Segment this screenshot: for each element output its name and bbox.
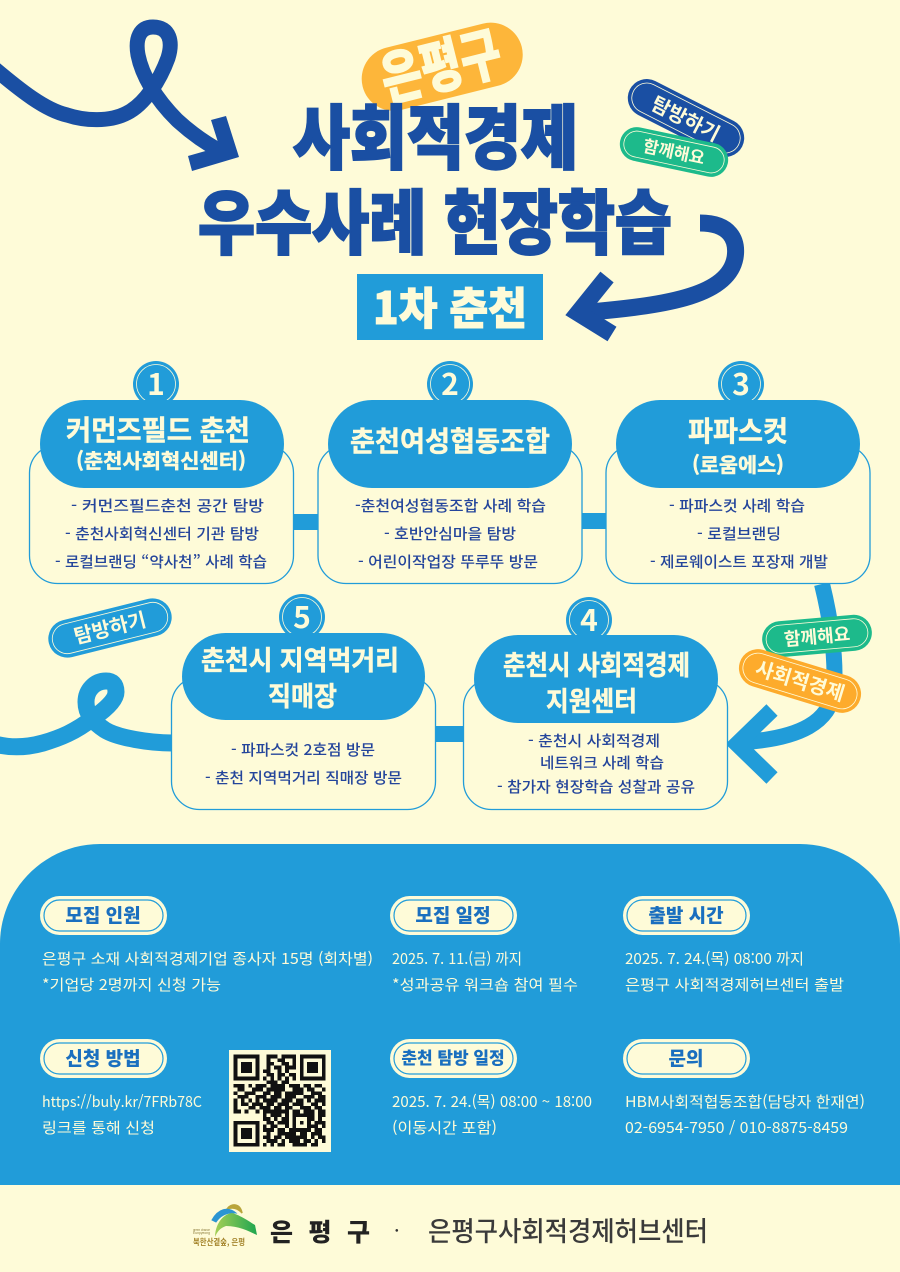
step 5 list — [205, 739, 402, 788]
text: 모집 일정 details: *성과공유 워크숍 참여 필수 — [392, 974, 578, 995]
step 1 heading pill: (춘천사회혁신센터) — [76, 445, 246, 474]
title — [198, 83, 672, 269]
subtitle box: 1차 춘천: 1차 춘천 — [373, 273, 527, 337]
text: 문의 details: 02-6954-7950 / 010-8875-8459 — [625, 1117, 848, 1138]
text: 모집 인원 details — [42, 948, 373, 995]
step 1 list: - 춘천사회혁신센터 기관 탐방 — [65, 523, 259, 544]
footer logo: Eunpyeong mountain mark — [193, 1205, 257, 1248]
label: 모집 일정 — [390, 896, 517, 935]
step 2 list: - 호반안심마을 탐방 — [384, 523, 516, 544]
label: 출발 시간 — [623, 896, 750, 935]
step 1 heading pill — [40, 400, 284, 488]
step 4 list: 네트워크 사례 학습 — [540, 752, 664, 773]
label: 출발 시간: 출발 시간 — [648, 901, 724, 928]
footer logo: Eunpyeong mountain mark: green chance — [193, 1228, 210, 1232]
text: 출발 시간 details: 은평구 사회적경제허브센터 출발 — [625, 974, 844, 995]
tag: 함께해요 green — [617, 124, 731, 180]
tag: 함께해요 green: 함께해요 — [641, 132, 708, 169]
title: 사회적경제 — [293, 83, 578, 184]
panel: step 4 — [464, 596, 728, 810]
tag: 탐방하기 dark blue: 탐방하기 — [647, 88, 726, 147]
step number 5 — [279, 593, 325, 640]
panel: info section — [0, 844, 900, 1185]
step 2 heading pill — [328, 400, 572, 488]
connector: card 4 to 5 — [436, 726, 463, 742]
panel: step 2 — [318, 360, 582, 584]
step number 3: 3 — [732, 360, 750, 404]
tag: 함께해요 green right — [761, 613, 873, 659]
step number 2 — [427, 360, 473, 407]
tag: 사회적경제 orange: 사회적경제 — [752, 652, 849, 707]
step number 3 — [718, 360, 764, 407]
step 5 list: - 춘천 지역먹거리 직매장 방문 — [205, 767, 402, 788]
step 3 list: - 제로웨이스트 포장재 개발 — [650, 551, 828, 572]
panel: step 5 — [172, 593, 436, 810]
text: 모집 인원 details: *기업당 2명까지 신청 가능 — [42, 974, 221, 995]
connector: card 2 to 3 — [582, 513, 606, 529]
label: 문의 — [623, 1039, 750, 1078]
label: 문의: 문의 — [669, 1044, 703, 1071]
label: 모집 인원: 모집 인원 — [65, 901, 141, 928]
squiggle: left light blue loop to card 5 — [0, 681, 172, 747]
arrow: top-left looping dark blue arrow — [0, 27, 239, 171]
qr code — [229, 1050, 331, 1152]
step 2 list — [355, 495, 546, 572]
footer text: 은평구사회적경제허브센터: 은평구사회적경제허브센터 — [428, 1210, 708, 1249]
step 4 list: - 춘천시 사회적경제 — [528, 730, 660, 751]
footer logo: Eunpyeong mountain mark: 북한산곁숲, 은평 — [193, 1236, 245, 1248]
step number 2: 2 — [441, 360, 459, 404]
step 4 heading pill: 춘천시 사회적경제 — [503, 644, 690, 683]
text: 춘천 탐방 일정 details: (이동시간 포함) — [392, 1117, 497, 1138]
label: 신청 방법: 신청 방법 — [65, 1044, 141, 1071]
tag: 탐방하기 light blue — [44, 594, 176, 662]
label: 모집 인원 — [40, 896, 167, 935]
text: 출발 시간 details: 2025. 7. 24.(목) 08:00 까지 — [625, 948, 804, 969]
step 4 list: - 참가자 현장학습 성찰과 공유 — [497, 776, 695, 797]
text: 춘천 탐방 일정 details: 2025. 7. 24.(목) 08:00 ~ 18:00 — [392, 1091, 592, 1112]
step number 1 — [133, 360, 179, 407]
text: 모집 인원 details: 은평구 소재 사회적경제기업 종사자 15명 (회차별) — [42, 948, 373, 969]
step number 5: 5 — [293, 593, 311, 637]
step 3 heading pill: 파파스컷 — [688, 410, 788, 450]
text: 신청 방법 details: https://buly.kr/7FRb78C — [42, 1091, 202, 1112]
step 1 list — [55, 495, 267, 572]
connector: card 1 to 2 — [294, 514, 318, 530]
step 3 heading pill — [616, 400, 860, 488]
step 5 heading pill: 직매장 — [268, 675, 337, 714]
text: 춘천 탐방 일정 details — [392, 1091, 592, 1138]
text: 문의 details — [625, 1091, 865, 1138]
footer logo: Eunpyeong mountain mark: Eunpyeong — [193, 1231, 210, 1235]
panel: step 3 — [606, 360, 870, 584]
step 3 list — [650, 495, 828, 572]
step 2 heading pill: 춘천여성협동조합 — [350, 420, 550, 460]
tag: 사회적경제 orange — [734, 644, 866, 718]
step 1 list: - 로컬브랜딩 “약사천” 사례 학습 — [55, 551, 267, 572]
label: 춘천 탐방 일정 — [390, 1039, 517, 1078]
step 3 list: - 로컬브랜딩 — [697, 523, 781, 544]
text: 모집 일정 details: 2025. 7. 11.(금) 까지 — [392, 948, 522, 969]
step 1 list: - 커먼즈필드춘천 공간 탐방 — [71, 495, 264, 516]
panel: step 1 — [30, 360, 294, 584]
text: 출발 시간 details — [625, 948, 844, 995]
footer text: 은평구: 은 평 구 — [270, 1213, 370, 1249]
label: 모집 일정: 모집 일정 — [415, 901, 491, 928]
badge: 은평구: 은평구 — [371, 7, 509, 118]
footer text: separator dot: · — [394, 1215, 400, 1244]
arrow: right curved dark blue arrow — [578, 223, 736, 334]
step 5 heading pill — [182, 633, 425, 720]
text: 문의 details: HBM사회적협동조합(담당자 한재연) — [625, 1091, 865, 1112]
tag: 탐방하기 dark blue — [621, 72, 751, 164]
step 1 heading pill: 커먼즈필드 춘천 — [66, 409, 250, 449]
step 2 list: - 어린이작업장 뚜루뚜 방문 — [358, 551, 538, 572]
step number 1: 1 — [147, 360, 165, 404]
text: 신청 방법 details — [42, 1091, 202, 1138]
step 2 list: -춘천여성협동조합 사례 학습 — [355, 495, 546, 516]
step 4 list — [497, 730, 695, 797]
step number 4: 4 — [580, 596, 598, 640]
step 4 heading pill — [474, 635, 718, 723]
step 3 list: - 파파스컷 사례 학습 — [669, 495, 805, 516]
text: 신청 방법 details: 링크를 통해 신청 — [42, 1117, 155, 1138]
step 4 heading pill: 지원센터 — [546, 680, 637, 719]
step 5 list: - 파파스컷 2호점 방문 — [231, 739, 375, 760]
step number 4 — [566, 596, 612, 643]
label: 신청 방법 — [40, 1039, 167, 1078]
title: 우수사례 현장학습 — [198, 168, 672, 269]
tag: 탐방하기 light blue: 탐방하기 — [70, 604, 149, 650]
step 3 heading pill: (로움에스) — [692, 449, 784, 478]
arrow: right light blue arrow to card 4 — [737, 584, 834, 778]
step 5 heading pill: 춘천시 지역먹거리 — [201, 639, 399, 678]
label: 춘천 탐방 일정: 춘천 탐방 일정 — [401, 1044, 505, 1069]
text: 모집 일정 details — [392, 948, 578, 995]
tag: 함께해요 green right: 함께해요 — [783, 620, 851, 652]
